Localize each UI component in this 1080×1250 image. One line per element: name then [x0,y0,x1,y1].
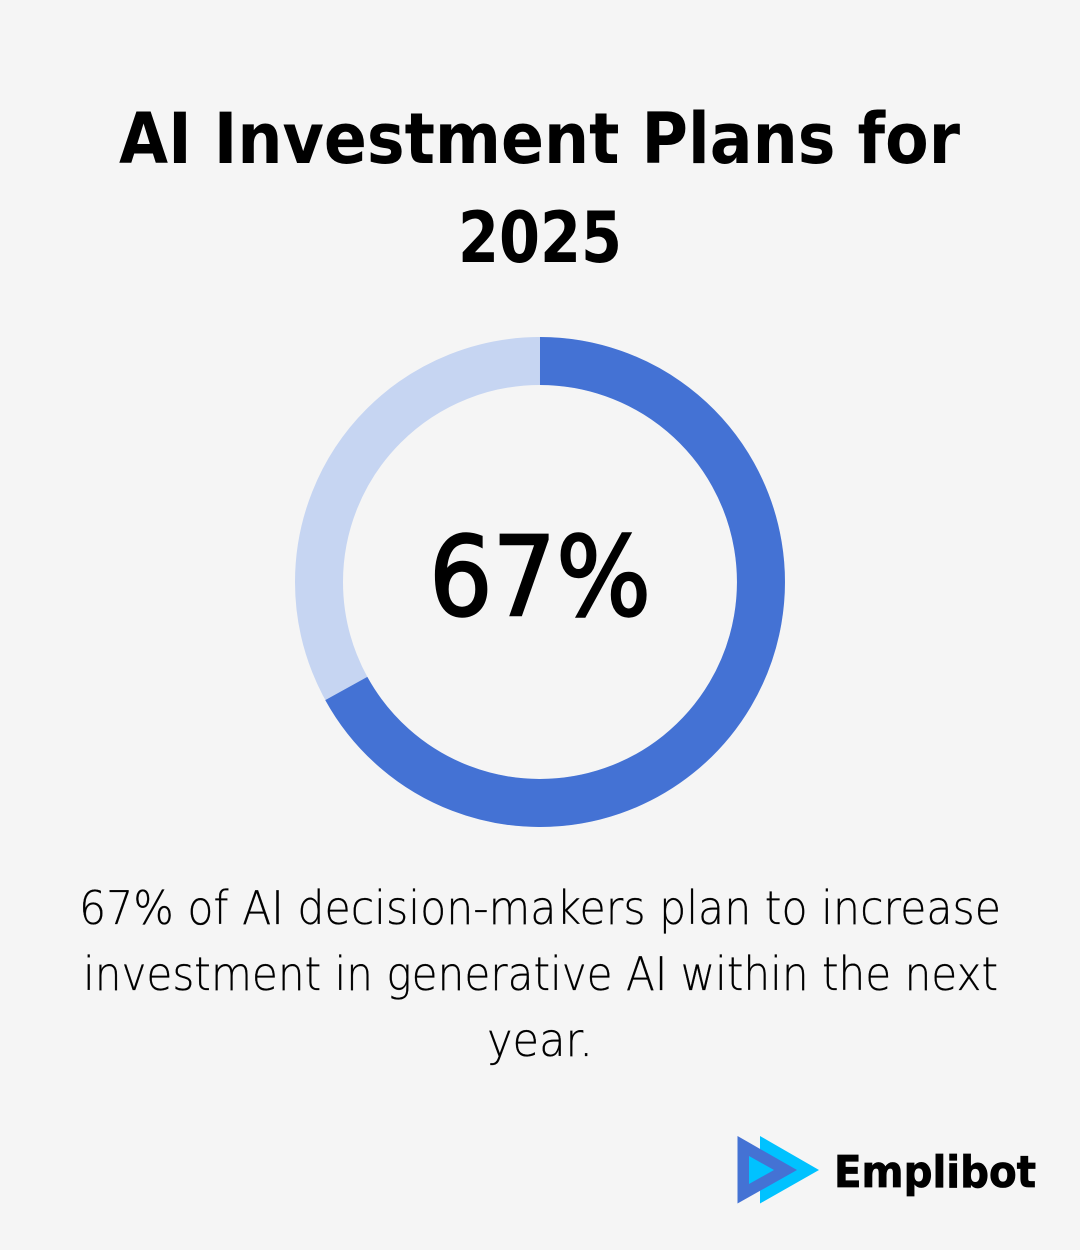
donut chart [319,361,761,803]
logo: Emplibot: Emplibot [834,1147,1036,1198]
logo: Emplibot [738,1136,1036,1204]
description text [79,881,1001,1067]
title: 2025 [458,197,622,279]
title: AI Investment Plans for [119,98,960,180]
description text: investment in generative AI within the next [83,947,998,1001]
donut value: 67% [429,513,651,641]
title [119,98,960,279]
description text: 67% of AI decision-makers plan to increase [79,881,1001,935]
description text: year. [487,1013,593,1067]
